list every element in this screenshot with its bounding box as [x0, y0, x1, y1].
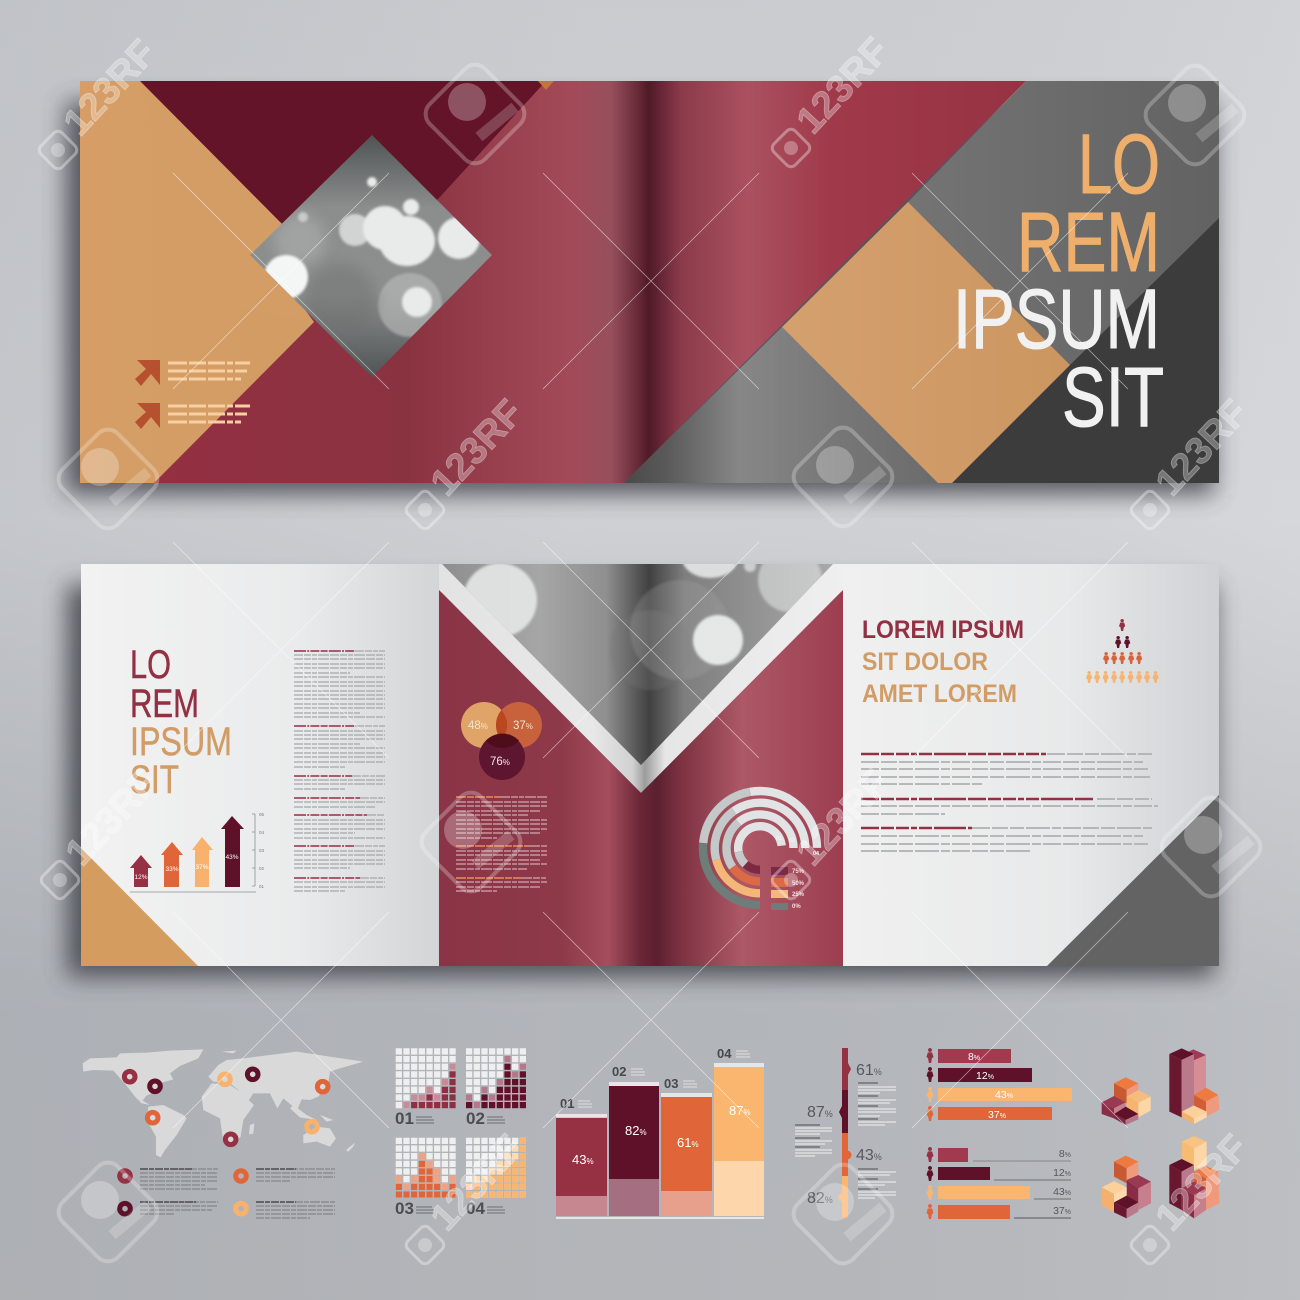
infographic: horizontal bars with labels inside: 8% [968, 1051, 980, 1063]
timeline values: 82% [807, 1190, 833, 1207]
watermark: 123RF text marks: 123RF [56, 32, 164, 144]
infographic: pixel grid 02 [466, 1051, 527, 1128]
radial chart ring labels [776, 836, 820, 857]
inside: red chevron panel [439, 590, 843, 966]
watermark: 123RF text marks: 123RF [789, 762, 897, 874]
infographic: horizontal bars with labels inside [926, 1048, 1072, 1121]
blocks top left [1102, 1077, 1151, 1125]
inside: tan corner triangle [81, 848, 198, 966]
inside: left title: LO [130, 643, 171, 687]
inside: left title [130, 643, 232, 802]
infographic: isometric blocks [1102, 1048, 1219, 1218]
infographic: horizontal bars with labels outside: 43% [1053, 1186, 1071, 1198]
watermark: 123RF text marks: 123RF [789, 30, 897, 142]
infographic: pixel grid 03: 03 [395, 1199, 414, 1218]
inside: venn diagram: 76% [490, 756, 510, 768]
venn 76% circle [479, 734, 525, 780]
infographic: pixel grid 03 [395, 1141, 457, 1218]
bar 01: 01 [560, 1096, 574, 1111]
inside: white chevron band [439, 564, 843, 793]
bar 04: 04 [717, 1046, 732, 1061]
bar 03 [661, 1076, 712, 1216]
bar 01 [556, 1096, 607, 1216]
infographic: pixel grid 04 [466, 1141, 527, 1218]
bar 02: 02 [612, 1064, 626, 1079]
map legend [120, 1169, 335, 1218]
watermark: 123RF text marks: 123RF [1148, 1127, 1256, 1239]
watermark: 123RF text marks: 123RF [1148, 392, 1256, 504]
infographic: horizontal bars with labels outside: 12% [1053, 1167, 1071, 1179]
radial chart ring labels: 03 [801, 841, 807, 847]
cover: upper gray field [908, 81, 1219, 365]
inside: text on red panel [456, 797, 547, 891]
timeline values: 43% [856, 1147, 882, 1164]
infographic: horizontal bars with labels inside: 37% [988, 1109, 1006, 1121]
radial chart ring labels: 02 [789, 838, 795, 844]
blocks bottom right [1169, 1136, 1219, 1218]
cover: bokeh diamond photo [250, 135, 493, 378]
blocks bottom left [1102, 1156, 1151, 1218]
bar 01: 43% [572, 1152, 594, 1167]
chart axis labels: 01 [259, 884, 265, 889]
infographic: horizontal bars with labels outside: 37% [1053, 1205, 1071, 1217]
bar 03: 03 [664, 1076, 678, 1091]
chart axis labels: 03 [259, 848, 265, 853]
bar 02: 82% [625, 1123, 647, 1138]
infographic: pixel grid 01: 01 [395, 1109, 414, 1128]
bar 04: 87% [729, 1103, 751, 1118]
radial chart legend: 50% [792, 881, 805, 887]
watermark: crossing hairlines [173, 173, 1128, 1128]
cover: arrow bullet two [135, 403, 250, 429]
inside: venn diagram: 48% [468, 720, 488, 732]
radial chart legend: 0% [792, 904, 801, 910]
arrow 43%: 43% [225, 854, 239, 861]
panel: brochure inside spread [81, 538, 1219, 966]
panel: brochure cover [80, 81, 1219, 483]
cover: dark gray triangle [952, 218, 1219, 483]
bar 03: 61% [677, 1135, 699, 1150]
cover: red field [80, 81, 1026, 483]
infographic: horizontal bars with labels inside: 43% [995, 1089, 1013, 1101]
cover: small orange corner [538, 81, 554, 90]
inside: gray corner triangle [1047, 795, 1219, 966]
cover: title: SIT [1062, 350, 1164, 444]
infographic: pixel grid 01 [395, 1051, 457, 1128]
inside: people pyramid [1086, 619, 1159, 683]
inside: left title: REM [130, 682, 199, 726]
infographic: stacked bar chart [556, 1046, 764, 1219]
inside: right page [841, 564, 1219, 966]
continents [83, 1049, 363, 1157]
inside: left page [81, 564, 441, 966]
timeline notes [795, 1083, 896, 1198]
cover: tan square [782, 202, 1070, 483]
inside: left title: SIT [130, 758, 179, 802]
chart axis labels: 02 [259, 866, 265, 871]
timeline values: 87% [807, 1104, 833, 1121]
timeline values: 61% [856, 1062, 882, 1079]
infographic: horizontal bars with labels outside: 8% [1059, 1148, 1071, 1160]
cover: title: IPSUM [953, 272, 1160, 366]
inside: right heading: AMET LOREM [862, 680, 1017, 708]
arrow 33%: 33% [165, 866, 179, 873]
watermark: small camera stamps [37, 127, 1171, 1266]
ring 03 [697, 785, 823, 911]
inside: left text column [294, 651, 385, 891]
cover: title: LO [1078, 117, 1160, 211]
inside: right heading: LOREM IPSUM [862, 616, 1024, 644]
ring 02 [713, 801, 807, 895]
cover: arrow bullet one [135, 360, 250, 386]
inside: arrow chart [130, 812, 265, 892]
radial chart legend: 25% [792, 892, 805, 898]
infographic: horizontal bars with labels inside: 12% [976, 1070, 994, 1082]
watermark: 123RF text marks: 123RF [423, 1127, 531, 1239]
infographic: horizontal bars with labels outside [926, 1147, 1071, 1219]
cover: title [953, 117, 1164, 444]
bar 02 [609, 1064, 659, 1216]
inside: left title: IPSUM [130, 720, 232, 764]
ring 04 [694, 782, 826, 914]
inside: right heading: SIT DOLOR [862, 648, 988, 676]
inside: venn diagram: 37% [513, 720, 533, 732]
blocks top right [1169, 1048, 1219, 1124]
venn 37% circle [496, 702, 542, 748]
watermark: 123RF text marks: 123RF [58, 762, 166, 874]
radial chart ring labels: 04 [813, 851, 820, 857]
ring 01 [729, 817, 791, 879]
infographic: vertical timeline [795, 1048, 896, 1218]
inside: right heading [862, 616, 1024, 708]
cover: tan field [80, 81, 314, 483]
venn 48% circle [461, 702, 507, 748]
infographic: pixel grid 04: 04 [466, 1199, 485, 1218]
inside: venn diagram [461, 702, 542, 780]
bar 04 [714, 1046, 764, 1216]
chart axis labels: 04 [259, 830, 265, 835]
inside: right text block [861, 754, 1158, 851]
radial chart legend: 75% [792, 869, 805, 875]
arrow 37%: 37% [195, 864, 209, 871]
cover: lower gray triangle [624, 327, 938, 483]
chart axis labels [259, 812, 265, 889]
radial chart legend [771, 867, 805, 910]
map markers [124, 1069, 328, 1145]
inside: bokeh photo [442, 564, 833, 765]
infographic: pixel grid 02: 02 [466, 1109, 485, 1128]
chart axis labels: 05 [259, 812, 265, 817]
infographic: world map [83, 1049, 363, 1218]
watermark: 123RF text marks: 123RF [423, 392, 531, 504]
inside: radial chart [694, 782, 826, 914]
brochure shadows [66, 102, 1215, 977]
arrow 12%: 12% [134, 874, 148, 881]
cover: title: REM [1017, 195, 1160, 289]
cover: maroon triangle [140, 81, 546, 256]
timeline values [807, 1062, 882, 1207]
radial chart ring labels: 01 [776, 836, 782, 842]
